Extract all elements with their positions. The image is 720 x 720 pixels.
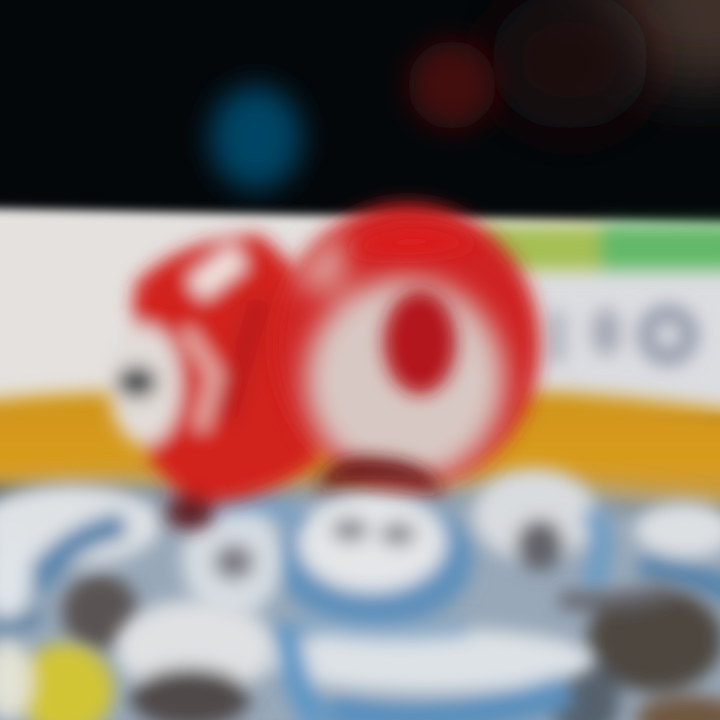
red centre numeral bbox=[384, 290, 456, 394]
white panel bbox=[295, 235, 505, 482]
ball body bbox=[276, 203, 540, 487]
red ball left bbox=[109, 235, 330, 530]
blue background light bbox=[210, 86, 302, 190]
ball left bbox=[0, 485, 160, 650]
ball centre bbox=[277, 492, 473, 628]
ball centre left bbox=[182, 502, 300, 618]
faded lettering on band bbox=[550, 308, 690, 362]
white band bbox=[0, 208, 720, 420]
ball lower right bbox=[550, 588, 720, 720]
lower balls base bbox=[0, 482, 720, 720]
red ball right bbox=[276, 203, 540, 495]
red top cap bbox=[345, 229, 478, 255]
dark mouth shadow bbox=[315, 458, 445, 495]
ball right bbox=[473, 469, 720, 600]
gold rim bbox=[0, 391, 720, 515]
lower balls group bbox=[0, 469, 720, 720]
ball bottom centre bbox=[265, 625, 595, 720]
green and yellow stripe bbox=[480, 224, 720, 270]
ball bottom left bbox=[115, 600, 275, 720]
yellow ball bbox=[0, 640, 113, 720]
red background light bbox=[408, 41, 496, 129]
